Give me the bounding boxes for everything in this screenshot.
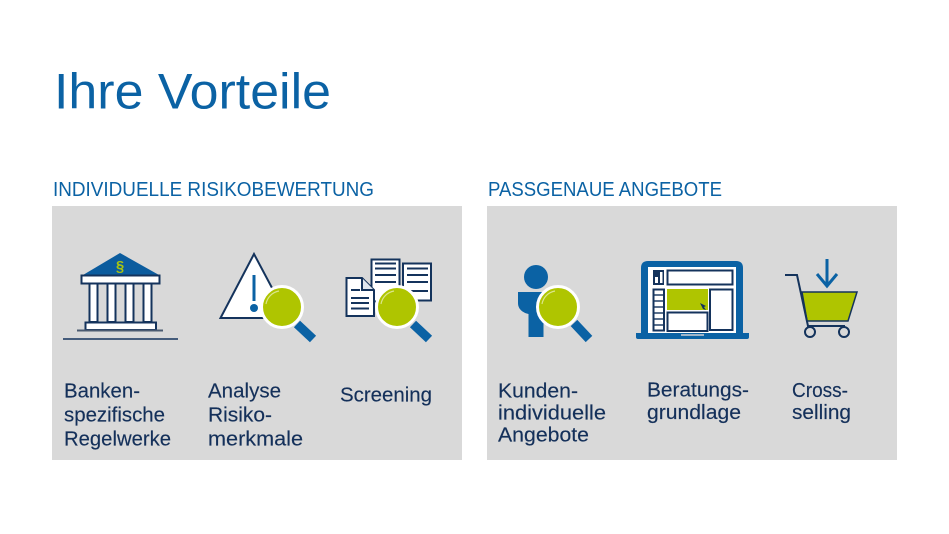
label: Banken-spezifische Regelwerke: Regelwerke <box>64 428 171 450</box>
icon: bank building: § <box>116 258 124 275</box>
label: Cross-selling: Cross- <box>792 380 848 402</box>
label: Analyse Risikomerkmale: Analyse <box>208 380 281 402</box>
label: Cross-selling: selling <box>792 402 851 424</box>
label: Screening: Screening <box>340 384 432 406</box>
icon: bank building <box>63 253 178 339</box>
label: Kunden-individuelle Angebote: Kunden- <box>498 380 578 402</box>
heading: individuelle Risikobewertung: INDIVIDUELLE RISIKOBEWERTUNG <box>53 179 374 201</box>
label: Beratungsgrundlage: Beratungs- <box>647 380 749 402</box>
label: Beratungsgrundlage: grundlage <box>647 402 741 424</box>
icon: laptop with dashboard <box>636 261 749 339</box>
icon: warning triangle with magnifier <box>220 254 313 339</box>
label: Kunden-individuelle Angebote <box>498 380 606 446</box>
icon: person with magnifier <box>518 265 589 339</box>
panel: individuelle Risikobewertung <box>52 206 462 460</box>
label: Beratungsgrundlage <box>647 380 749 424</box>
label: Analyse Risikomerkmale: merkmale <box>208 428 303 450</box>
panel: passgenaue Angebote <box>487 206 897 460</box>
icon: documents with magnifier <box>346 260 431 339</box>
title: Ihre Vorteile <box>54 64 331 120</box>
label: Cross-selling <box>792 380 851 424</box>
label: Banken-spezifische Regelwerke: Banken- <box>64 380 140 402</box>
label: Banken-spezifische Regelwerke: spezifische <box>64 404 165 426</box>
label: Analyse Risikomerkmale: Risiko- <box>208 404 272 426</box>
label: Banken-spezifische Regelwerke <box>64 380 171 450</box>
label: Kunden-individuelle Angebote: Angebote <box>498 424 589 446</box>
icon: shopping cart with arrow <box>785 259 857 337</box>
label: Analyse Risikomerkmale <box>208 380 303 450</box>
label: Kunden-individuelle Angebote: individuelle <box>498 402 606 424</box>
heading: passgenaue Angebote: PASSGENAUE ANGEBOTE <box>488 179 722 201</box>
